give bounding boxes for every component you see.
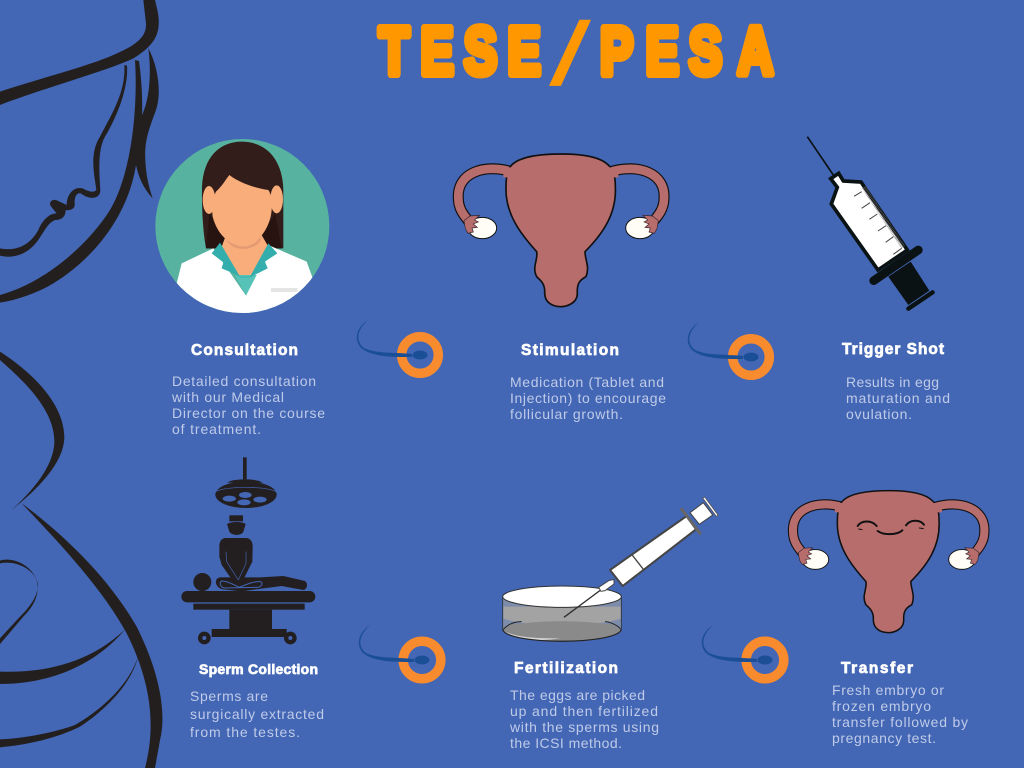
- icon: doctor avatar: [155, 139, 329, 317]
- step: Transfer: [832, 660, 968, 746]
- step: Stimulation: Injection) to encourage: [510, 390, 666, 406]
- step: Transfer: frozen embryo: [832, 698, 931, 714]
- step: Trigger Shot: ovulation.: [846, 406, 912, 422]
- icon: syringe: [807, 137, 933, 309]
- connector: sperm and egg 2: [688, 322, 769, 375]
- connector: sperm and egg 3: [359, 625, 441, 679]
- step: Consultation: of treatment.: [172, 421, 261, 437]
- step: Sperm Collection: Sperms are: [190, 688, 268, 704]
- decoration: woman's face outline: [0, 0, 159, 303]
- step: Trigger Shot: maturation and: [846, 390, 950, 406]
- icon: smiling uterus: [793, 491, 984, 633]
- connector: sperm and egg 4: [702, 625, 784, 679]
- icon: uterus with ovaries: [458, 154, 664, 307]
- step: Consultation: Detailed consultation: [172, 373, 316, 389]
- step: Stimulation: [510, 342, 666, 422]
- connector: sperm and egg 1: [357, 320, 438, 373]
- step: Consultation: Consultation: [191, 342, 298, 359]
- step: Trigger Shot: Results in egg: [846, 374, 939, 390]
- step: Fertilization: Fertilization: [514, 660, 618, 677]
- step: Transfer: Transfer: [841, 660, 913, 677]
- step: Fertilization: up and then fertilized: [510, 703, 658, 719]
- icon: surgeon operating: [181, 457, 315, 644]
- decoration: pregnant belly outline: [0, 352, 162, 768]
- step: Consultation: [171, 342, 325, 437]
- title: /: [549, 4, 592, 105]
- step: Transfer: pregnancy test.: [832, 730, 936, 746]
- step: Transfer: Fresh embryo or: [832, 682, 944, 698]
- title: [379, 4, 773, 105]
- step: Trigger Shot: Trigger Shot: [842, 341, 944, 358]
- step: Sperm Collection: from the testes.: [190, 724, 300, 740]
- step: Sperm Collection: [190, 661, 324, 740]
- title: TESE: [379, 15, 541, 89]
- icon: petri dish and syringe: [503, 498, 717, 641]
- step: Sperm Collection: surgically extracted: [190, 706, 324, 722]
- step: Fertilization: [509, 660, 659, 751]
- step: Sperm Collection: Sperm Collection: [199, 661, 318, 677]
- step: Stimulation: follicular growth.: [510, 406, 623, 422]
- step: Stimulation: Stimulation: [521, 342, 619, 359]
- title: PESA: [600, 15, 773, 89]
- step: Transfer: transfer followed by: [832, 714, 968, 730]
- step: Trigger Shot: [842, 341, 950, 422]
- step: Stimulation: Medication (Tablet and: [510, 374, 664, 390]
- step: Consultation: with our Medical: [171, 389, 284, 405]
- step: Fertilization: The eggs are picked: [510, 687, 645, 703]
- step: Consultation: Director on the course: [172, 405, 325, 421]
- step: Fertilization: with the sperms using: [509, 719, 659, 735]
- step: Fertilization: the ICSI method.: [510, 735, 622, 751]
